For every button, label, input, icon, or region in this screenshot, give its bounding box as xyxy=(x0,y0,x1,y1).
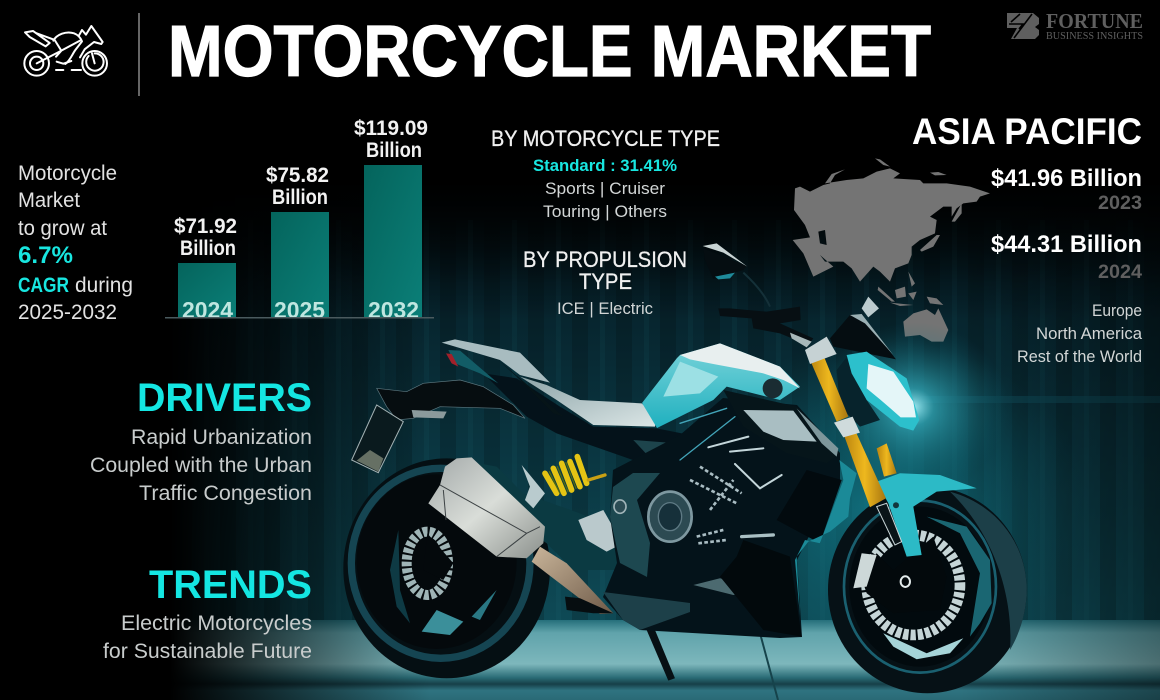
heading: Asia Pacific figures: 2023 xyxy=(1098,193,1142,214)
bar chart: market size xyxy=(165,117,434,323)
text block: drivers: Coupled with the Urban xyxy=(90,454,312,477)
text block: by motorcycle type xyxy=(491,126,720,221)
inner gold fork xyxy=(877,443,897,477)
text block: by motorcycle type: BY MOTORCYCLE TYPE xyxy=(491,126,720,151)
text block: drivers: DRIVERS xyxy=(137,376,312,420)
text block: by motorcycle type: Sports | Cruiser xyxy=(545,179,665,198)
list: other regions xyxy=(1017,301,1143,366)
icon: motorcycle outline xyxy=(24,26,107,76)
muffler xyxy=(428,457,613,614)
heading: Asia Pacific figures: $44.31 Billion xyxy=(991,231,1142,258)
heading: Asia Pacific figures: 2024 xyxy=(1098,262,1142,283)
text block: by propulsion type: ICE | Electric xyxy=(557,299,653,318)
text block: CAGR growth: Market xyxy=(18,189,80,212)
heading: Asia Pacific figures: $41.96 Billion xyxy=(991,165,1142,192)
tail bracket xyxy=(377,380,525,420)
rear half of motorcycle xyxy=(343,339,690,681)
bar 2025: Billion xyxy=(272,186,328,209)
bar 2032: 2032 xyxy=(368,297,419,323)
bar 2024: $71.92 xyxy=(174,215,237,238)
handlebar xyxy=(718,307,813,347)
front half of motorcycle xyxy=(614,243,1027,693)
rear wheel xyxy=(343,458,550,678)
text block: drivers xyxy=(90,376,312,505)
title: MOTORCYCLE MARKET xyxy=(168,12,931,92)
header divider xyxy=(138,13,140,96)
heading: Asia Pacific figures: ASIA PACIFIC xyxy=(912,111,1142,152)
logo: Fortune Business Insights: FORTUNE xyxy=(1046,9,1143,33)
licence plate xyxy=(352,405,403,473)
fender xyxy=(877,473,977,557)
text block: CAGR growth: during xyxy=(75,274,133,297)
dark cowl behind fork xyxy=(837,355,880,427)
text block: drivers: Rapid Urbanization xyxy=(131,426,312,449)
text block: by propulsion type: TYPE xyxy=(579,269,632,294)
swingarm xyxy=(470,462,617,570)
fork leg below tube xyxy=(877,503,902,545)
gold fork tubes xyxy=(805,337,886,507)
frame highlights xyxy=(680,408,782,537)
bar 2032: Billion xyxy=(366,139,422,162)
side panel sliver xyxy=(633,440,678,465)
motorcycle illustration xyxy=(343,243,1027,693)
text block: CAGR growth xyxy=(18,162,133,324)
reflector xyxy=(412,410,447,418)
text block: by propulsion type: BY PROPULSION xyxy=(523,247,687,272)
fuel tank xyxy=(642,343,800,428)
mirror xyxy=(703,243,770,307)
seat xyxy=(520,377,657,427)
logo: Fortune Business Insights: BUSINESS INSIGHTS xyxy=(1046,31,1143,42)
lower fairing xyxy=(693,540,802,637)
bar 2024: 2024 xyxy=(182,297,233,323)
text block: trends: Electric Motorcycles xyxy=(121,612,312,635)
tail xyxy=(442,339,563,417)
upper side panel xyxy=(723,390,840,463)
headlight xyxy=(847,352,919,431)
bar 2025 xyxy=(266,164,329,323)
text block: CAGR growth: Motorcycle xyxy=(18,162,117,185)
text block: trends: TRENDS xyxy=(149,563,312,607)
text block: trends: for Sustainable Future xyxy=(103,640,312,663)
text block: CAGR growth: to grow at xyxy=(18,217,107,240)
text block: by motorcycle type: Standard : 31.41% xyxy=(533,156,677,175)
belly slab behind pipe xyxy=(565,597,613,613)
bar 2024: Billion xyxy=(180,237,236,260)
list: other regions: Rest of the World xyxy=(1017,347,1142,366)
text block: drivers: Traffic Congestion xyxy=(139,482,312,505)
radiator block xyxy=(777,470,842,543)
bar 2025: 2025 xyxy=(274,297,325,323)
main body xyxy=(603,398,840,638)
wall seen behind bodywork xyxy=(795,460,857,617)
text block: by propulsion type xyxy=(523,247,687,318)
subframe xyxy=(483,373,690,468)
list: other regions: North America xyxy=(1036,324,1143,343)
logo: Fortune Business Insights xyxy=(1007,9,1143,42)
list: other regions: Europe xyxy=(1092,301,1142,320)
footpeg plate xyxy=(522,465,545,508)
text block: CAGR growth: 6.7% xyxy=(18,242,73,269)
text block: CAGR growth: CAGR xyxy=(18,274,69,297)
chrome footrest xyxy=(578,510,617,552)
text block: CAGR growth: 2025-2032 xyxy=(18,301,117,324)
front wheel xyxy=(828,487,1027,693)
top fairing xyxy=(830,297,896,359)
engine xyxy=(614,467,742,543)
bar 2032 xyxy=(354,117,428,323)
bar 2024 xyxy=(174,215,237,323)
heading: Asia Pacific figures xyxy=(912,111,1142,283)
kick stand xyxy=(647,630,675,681)
text block: by motorcycle type: Touring | Others xyxy=(543,202,667,221)
bar 2032: $119.09 xyxy=(354,117,428,140)
map: Asia Pacific xyxy=(793,158,990,342)
bar 2025: $75.82 xyxy=(266,164,329,187)
rear shock xyxy=(545,457,605,493)
text block: trends xyxy=(103,563,312,663)
